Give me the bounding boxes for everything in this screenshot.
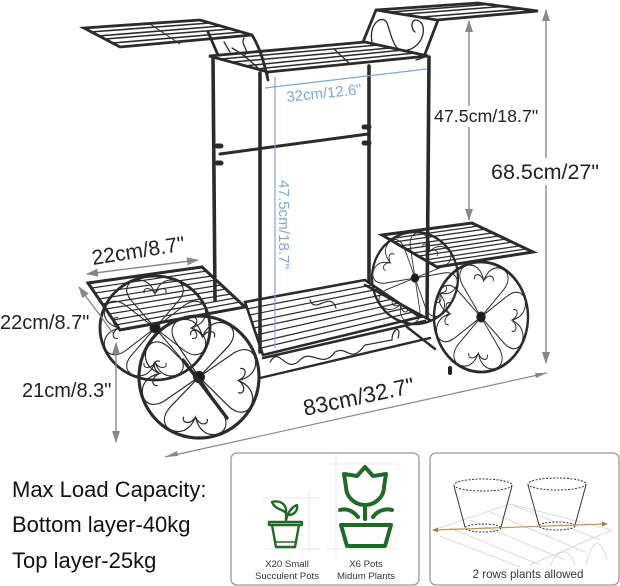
- load capacity text: [12, 477, 206, 573]
- plant stand product photo: [84, 3, 538, 443]
- small pots caption: X20 Small: [265, 559, 309, 570]
- dimension: inner height (blue): 47.5cm/18.7": [275, 180, 292, 269]
- dimension: total length: [165, 373, 547, 457]
- dimension: shelf depth: [0, 287, 113, 334]
- right small shelf: [382, 223, 533, 267]
- dimension: wheel height: 21cm/8.3": [22, 380, 111, 402]
- wheel: back right: [356, 215, 474, 341]
- dimension: total height: 68.5cm/27": [491, 160, 599, 184]
- dimension: inner depth (blue): 32cm/12.6": [286, 81, 362, 106]
- dimension: upper height: 47.5cm/18.7": [434, 106, 538, 126]
- icon: small succulent pot: [269, 501, 302, 547]
- pot outlines: [454, 478, 586, 532]
- rack outline: [433, 504, 612, 567]
- wheel: back left: [100, 276, 210, 380]
- left small shelf: [88, 267, 245, 330]
- load capacity text: Top layer-25kg: [12, 548, 156, 573]
- panel: two rows of plants: [430, 453, 619, 585]
- dimension: shelf depth: 22cm/8.7": [0, 312, 89, 334]
- caption: 2 rows plants allowed: [473, 568, 583, 581]
- frame legs: [213, 57, 429, 352]
- dimension: shelf width: 22cm/8.7": [90, 233, 186, 270]
- dimension: inner depth (blue): [265, 69, 427, 106]
- icon: tulip in planter: [340, 467, 392, 546]
- top right shelf: [363, 3, 538, 54]
- top left shelf: [84, 20, 268, 80]
- panel: pot capacity: [231, 453, 419, 585]
- medium pots caption: X6 Pots: [349, 559, 383, 570]
- arrow: row width: [432, 522, 608, 532]
- dimension: wheel height: [22, 343, 116, 442]
- panel: pot capacity: Succulent Pots: [255, 571, 319, 582]
- load capacity text: Bottom layer-40kg: [12, 512, 191, 537]
- dimension: total length: 83cm/32.7": [301, 373, 417, 421]
- top centre shelf: [209, 42, 428, 76]
- panel: pot capacity: Midum Plants: [337, 571, 395, 582]
- wheel: front right: [430, 257, 532, 377]
- load capacity text: Max Load Capacity:: [12, 477, 206, 502]
- bottom shelf: [245, 280, 435, 378]
- wheel: front left: [134, 311, 264, 443]
